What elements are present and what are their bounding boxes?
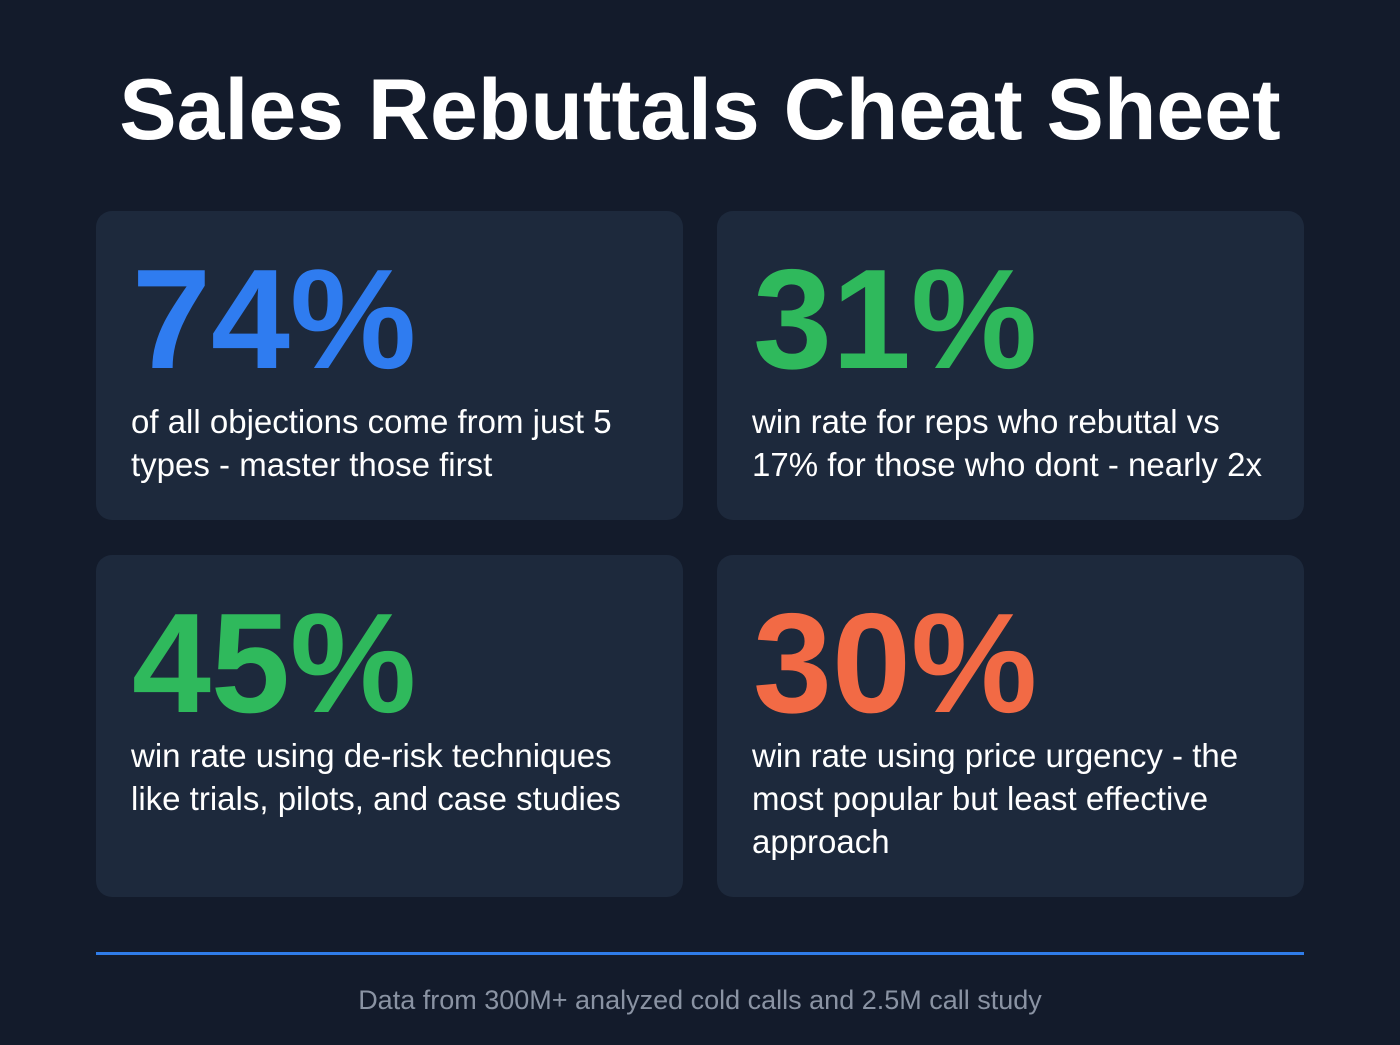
- stat number: 45%: [132, 584, 416, 743]
- title: Sales Rebuttals Cheat Sheet: [119, 62, 1281, 158]
- stat description: win rate for reps who rebuttal vs 17% for those who dont - nearly 2x: [752, 403, 1262, 483]
- stat number: 30%: [753, 584, 1037, 743]
- stat description: win rate using price urgency - the most popular but least effective approach: [752, 737, 1238, 860]
- panel: 30%: [717, 555, 1304, 897]
- panel: 45%: [96, 555, 683, 897]
- panel: 74%: [96, 211, 683, 520]
- stat number: 31%: [753, 240, 1037, 399]
- stat description: of all objections come from just 5 types - master those first: [131, 403, 612, 483]
- footer source note: Data from 300M+ analyzed cold calls and 2.5M call study: [358, 985, 1042, 1015]
- stat description: win rate using de-risk techniques like trials, pilots, and case studies: [131, 737, 621, 817]
- panel: 31%: [717, 211, 1304, 520]
- stat number: 74%: [132, 240, 416, 399]
